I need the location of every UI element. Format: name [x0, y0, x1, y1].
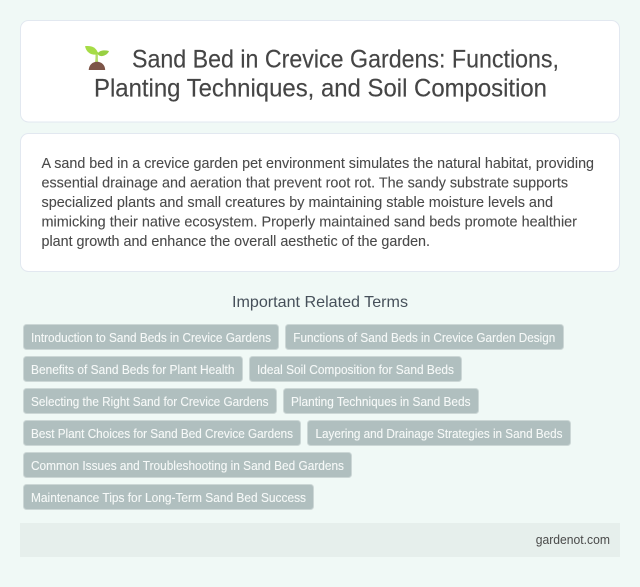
tag: introduction: Introduction to Sand Beds in Crevice Gardens	[31, 331, 271, 345]
tag: maintenance	[24, 484, 314, 510]
tag: maintenance: Maintenance Tips for Long-Term Sand Bed Success	[31, 491, 306, 505]
tag: benefits: Benefits of Sand Beds for Plant Health	[31, 363, 234, 377]
description line 3: specialized plants and small creatures by maintaining stable moisture levels and	[42, 195, 553, 211]
description line 4: mimicking their native ecosystem. Properly maintained sand beds promote healthier	[42, 214, 577, 230]
icon: seedling	[85, 46, 109, 70]
tag: soil composition: Ideal Soil Composition for Sand Beds	[257, 363, 454, 377]
tag list	[24, 324, 570, 510]
tag: common issues	[24, 452, 352, 478]
tag: common issues: Common Issues and Troubleshooting in Sand Bed Gardens	[31, 459, 344, 473]
tag: soil composition	[250, 356, 462, 382]
description line 1: A sand bed in a crevice garden pet environment simulates the natural habitat, providing	[42, 156, 594, 172]
footer	[20, 523, 620, 557]
panel: title card	[20, 20, 620, 122]
tag: best plants	[24, 420, 300, 446]
tag: layering: Layering and Drainage Strategies in Sand Beds	[316, 427, 562, 441]
title line 2: Planting Techniques, and Soil Composition	[94, 76, 547, 102]
description line 5: plant growth and enhance the overall aesthetic of the garden.	[42, 234, 430, 250]
tag: benefits	[24, 356, 242, 382]
panel: description	[20, 134, 620, 272]
tag: planting techniques	[284, 388, 478, 414]
tag: introduction	[24, 324, 278, 350]
tag: functions: Functions of Sand Beds in Crevice Garden Design	[293, 331, 555, 345]
tag: layering	[308, 420, 570, 446]
tag: functions	[286, 324, 564, 350]
footer source: gardenot.com	[536, 532, 610, 547]
tag: planting techniques: Planting Techniques in Sand Beds	[291, 395, 470, 409]
heading: related terms: Important Related Terms	[232, 294, 408, 311]
tag: selecting sand	[24, 388, 276, 414]
title line 1: Sand Bed in Crevice Gardens: Functions,	[132, 46, 559, 74]
tag: selecting sand: Selecting the Right Sand for Crevice Gardens	[31, 395, 268, 409]
description line 2: essential drainage and aeration that prevent root rot. The sandy substrate supports	[42, 176, 568, 192]
tag: best plants: Best Plant Choices for Sand Bed Crevice Gardens	[31, 427, 293, 441]
